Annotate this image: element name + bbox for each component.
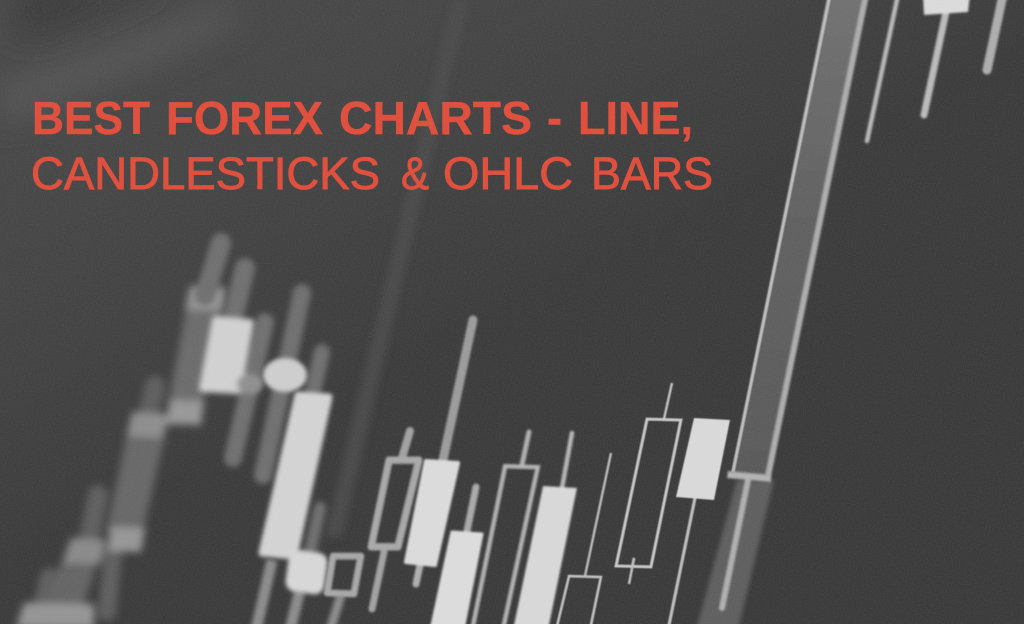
hollow candle, middle [472,432,538,624]
blurred candle: tall white body [262,395,329,556]
candle: lower-left faded [106,412,168,552]
top-right white candle [923,0,970,115]
title line 1: LINE, [578,92,693,144]
title line 1: - [547,92,562,144]
title line 2: BARS [591,148,713,199]
blurred candle: white upper body [203,320,263,394]
far wicks [42,386,155,612]
top-right thin wick [867,0,898,141]
wick of big candle [722,480,748,608]
title line 1: FOREX [166,92,323,144]
title line 2: CANDLESTICKS [31,148,380,199]
blurred candle: oval top [263,358,307,392]
candle: bottom-left faded [16,538,106,624]
lower wicks under tall candle [256,560,341,624]
blurred far-left candlesticks [16,286,226,624]
thin hollow candle, bottom [556,453,611,624]
big candle left edge [733,0,831,472]
hollow candle with wicks [371,431,419,609]
small blob [237,374,263,394]
big candle body [731,0,868,476]
title line 2: OHLC [443,148,573,199]
title line 2: & [401,148,429,199]
big candle right edge [768,0,867,476]
candle: upper-left faded [166,286,226,425]
white candle with long wick [406,320,473,584]
hollow small candle [327,556,361,594]
title line 1 [32,92,693,144]
title line 1: BEST [32,92,150,144]
blurred wicks behind the white candles [205,243,322,552]
big candle bottom edge [727,471,771,482]
white hatched candle [513,433,577,624]
thin hollow candle, upper [616,383,681,584]
band below big candle [696,480,774,624]
white candle near big candle [668,418,730,624]
white candle lower [431,487,482,624]
title line 2 [31,148,713,199]
large candle with lower band [696,0,868,624]
top-right thick wick [987,0,1003,70]
title line 1: CHARTS [339,92,532,144]
blurred candle: small white body [284,549,329,596]
